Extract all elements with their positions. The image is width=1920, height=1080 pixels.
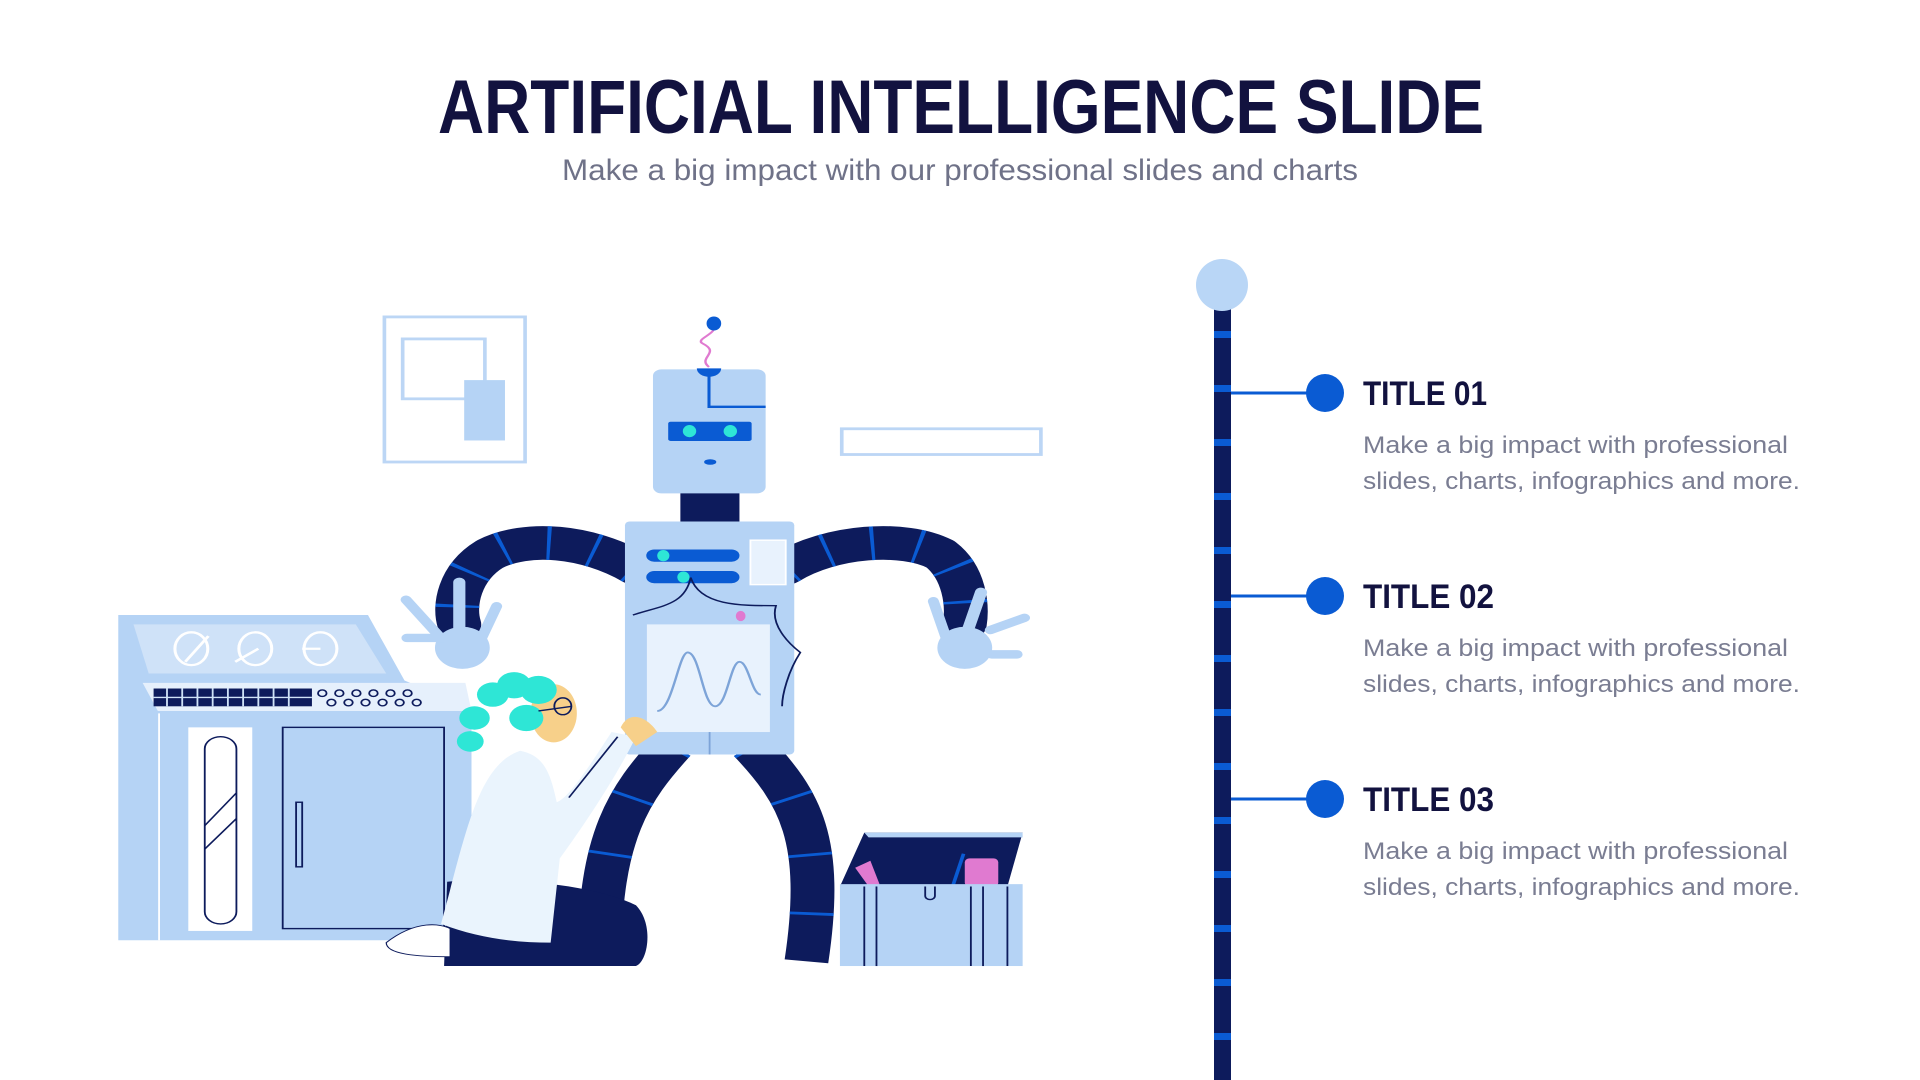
timeline top circle — [1196, 259, 1248, 311]
subtitle: Make a big impact with our professional slides and charts — [562, 154, 1358, 187]
timeline — [1196, 259, 1800, 1080]
item 1: slides, charts, infographics and more. — [1363, 468, 1800, 495]
robot arms — [457, 543, 966, 624]
item 2: TITLE 02 — [1363, 578, 1494, 616]
item 2: Make a big impact with professional — [1363, 635, 1788, 662]
robot legs — [599, 746, 813, 961]
item 1 — [1231, 374, 1800, 495]
timeline spine — [1214, 300, 1231, 1080]
title: ARTIFICIAL INTELLIGENCE SLIDE — [438, 65, 1484, 150]
robot head — [653, 316, 766, 493]
item 3: TITLE 03 — [1363, 781, 1494, 819]
wall shelf — [842, 429, 1041, 455]
toolbox — [840, 833, 1023, 966]
item 1: Make a big impact with professional — [1363, 432, 1788, 459]
picture frame — [384, 317, 525, 462]
item 3 — [1231, 780, 1800, 901]
console machine — [118, 615, 471, 940]
illustration: robot and scientist — [118, 316, 1041, 966]
item 2: slides, charts, infographics and more. — [1363, 671, 1800, 698]
item 1: TITLE 01 — [1363, 375, 1487, 413]
robot body — [625, 521, 800, 755]
scientist — [386, 672, 657, 966]
item 3: Make a big impact with professional — [1363, 838, 1788, 865]
robot neck — [680, 491, 739, 524]
item 3: slides, charts, infographics and more. — [1363, 874, 1800, 901]
item 2 — [1231, 577, 1800, 698]
robot hands — [398, 578, 1032, 669]
